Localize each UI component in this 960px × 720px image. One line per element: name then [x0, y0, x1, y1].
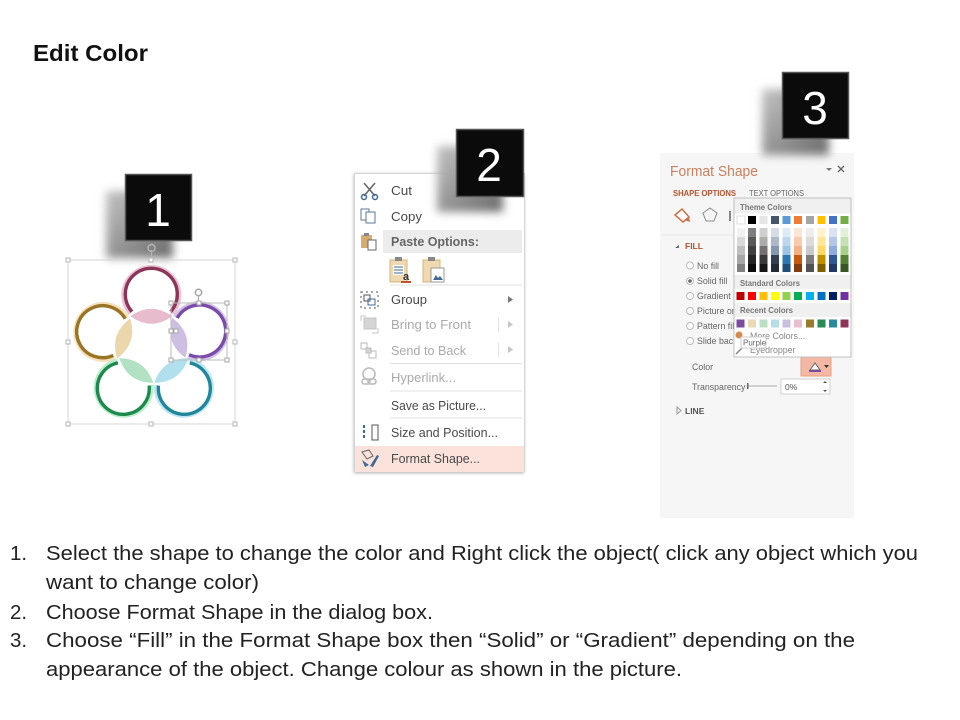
icon: hyperlink [362, 368, 376, 384]
more colors and eyedropper: Eyedropper [750, 345, 796, 355]
paste options highlight [383, 230, 522, 253]
menu labels: Bring to Front [391, 318, 472, 332]
pane controls [826, 166, 844, 172]
icon: paste picture [423, 257, 444, 282]
icon: format shape [362, 450, 379, 467]
standard colour swatches [736, 292, 848, 300]
line section heading [677, 406, 705, 416]
pane heading: Format Shape [670, 164, 758, 180]
format shape highlight [355, 446, 524, 472]
ring: bottom green [85, 356, 157, 427]
transparency control: 0% [785, 382, 798, 392]
more colors and eyedropper: More Colors... [750, 331, 805, 341]
icon: size cursor [729, 211, 731, 221]
menu labels [391, 184, 498, 466]
menu labels: Hyperlink... [391, 371, 456, 385]
step 3 instruction: Choose “Fill” in the Format Shape box then “Solid” or “Gradient” depending on the [46, 629, 855, 652]
step 3 badge shadow [762, 89, 829, 155]
icon: paste [361, 233, 376, 250]
title: Edit Color [33, 40, 148, 66]
petal: top pink [130, 309, 172, 324]
fill options: Gradient f [697, 291, 736, 301]
step 1 instruction: Select the shape to change the color and Right click the object( click any object which you [46, 542, 918, 565]
tooltip: purple: Purple [743, 338, 767, 348]
step 2 badge [456, 129, 524, 197]
colour picker dropdown [734, 198, 851, 357]
recent colors header: Recent Colors [740, 305, 793, 315]
selection frame [66, 244, 237, 426]
fill options: Pattern fill [697, 321, 736, 331]
icon: paste text: a [403, 271, 410, 283]
theme colour shades [737, 228, 848, 272]
step 1 badge: 1 [145, 184, 171, 236]
fill section heading: FILL [685, 241, 703, 251]
icon: paste text [390, 257, 411, 283]
petal: left tan [110, 316, 137, 361]
step 2 badge: 2 [476, 139, 502, 191]
recent colors header [734, 303, 850, 317]
ring: right purple [173, 296, 234, 364]
icon: pentagon [703, 208, 717, 221]
step 3 instruction: 3. [10, 629, 27, 652]
pane tabs: SHAPE OPTIONS [673, 188, 736, 198]
pane tabs [673, 188, 804, 198]
icon: fill bucket [675, 209, 690, 222]
theme colors header [734, 198, 850, 214]
step 1 badge [106, 174, 192, 258]
fill section heading [662, 235, 733, 251]
inner selection frame [169, 289, 229, 362]
submenu arrows [498, 296, 513, 357]
menu labels: Cut [391, 184, 413, 198]
petal: bottom blue [150, 352, 193, 389]
step 3 instruction: appearance of the object. Change colour as shown in the picture. [46, 658, 682, 681]
ring: bottom teal [150, 356, 223, 427]
menu labels: Size and Position... [391, 426, 498, 440]
color control [692, 357, 831, 376]
panel: step 2 context menu [354, 129, 524, 473]
pane tabs: TEXT OPTIONS [749, 188, 804, 198]
menu labels: Paste Options: [391, 235, 479, 249]
icon: bring to front [361, 316, 378, 333]
theme colour swatches [737, 216, 848, 224]
standard colors header [734, 275, 850, 289]
fill options [686, 261, 738, 346]
panel: step 1 shape selection [66, 174, 237, 427]
fill options: No fill [697, 261, 719, 271]
menu labels: Save as Picture... [391, 399, 486, 413]
menu labels: Send to Back [391, 344, 467, 358]
fill options: Solid fill [697, 276, 727, 286]
icon: group [361, 292, 378, 308]
theme colors header: Theme Colors [740, 202, 792, 212]
instructions text [10, 542, 918, 681]
ring: top maroon [123, 267, 179, 314]
standard colors header: Standard Colors [740, 278, 800, 288]
recent colour swatches [736, 320, 848, 328]
step 3 instruction [10, 629, 855, 681]
fill options: Picture or [697, 306, 735, 316]
petal: bottom green [115, 352, 158, 389]
petal: right lilac [165, 316, 192, 360]
icon: scissors [362, 183, 378, 200]
ring: left gold [68, 297, 130, 364]
color control: Color [692, 362, 713, 372]
step 3 badge [782, 72, 849, 139]
transparency control [692, 379, 830, 394]
fill options: Slide back [697, 336, 738, 346]
step 2 badge shadow [437, 146, 503, 212]
step 1 instruction: want to change color) [45, 571, 259, 594]
step 1 instruction: 1. [10, 542, 27, 565]
menu separators [390, 285, 522, 418]
menu labels: Format Shape... [391, 452, 480, 466]
line section heading: LINE [685, 406, 705, 416]
transparency control: Transparency [692, 382, 746, 392]
step 1 instruction [10, 542, 918, 594]
more colors and eyedropper [736, 331, 805, 355]
step 2 instruction: 2. [10, 601, 27, 624]
step 3 badge: 3 [802, 82, 828, 134]
icon: size and position [364, 425, 378, 440]
menu labels: Copy [391, 210, 423, 224]
step 2 instruction: Choose Format Shape in the dialog box. [46, 601, 433, 624]
icon: copy [361, 209, 375, 223]
menu labels: Group [391, 293, 427, 307]
panel: step 3 format shape pane [660, 72, 854, 518]
icon: send to back [361, 343, 376, 358]
ring diagram [68, 267, 234, 427]
